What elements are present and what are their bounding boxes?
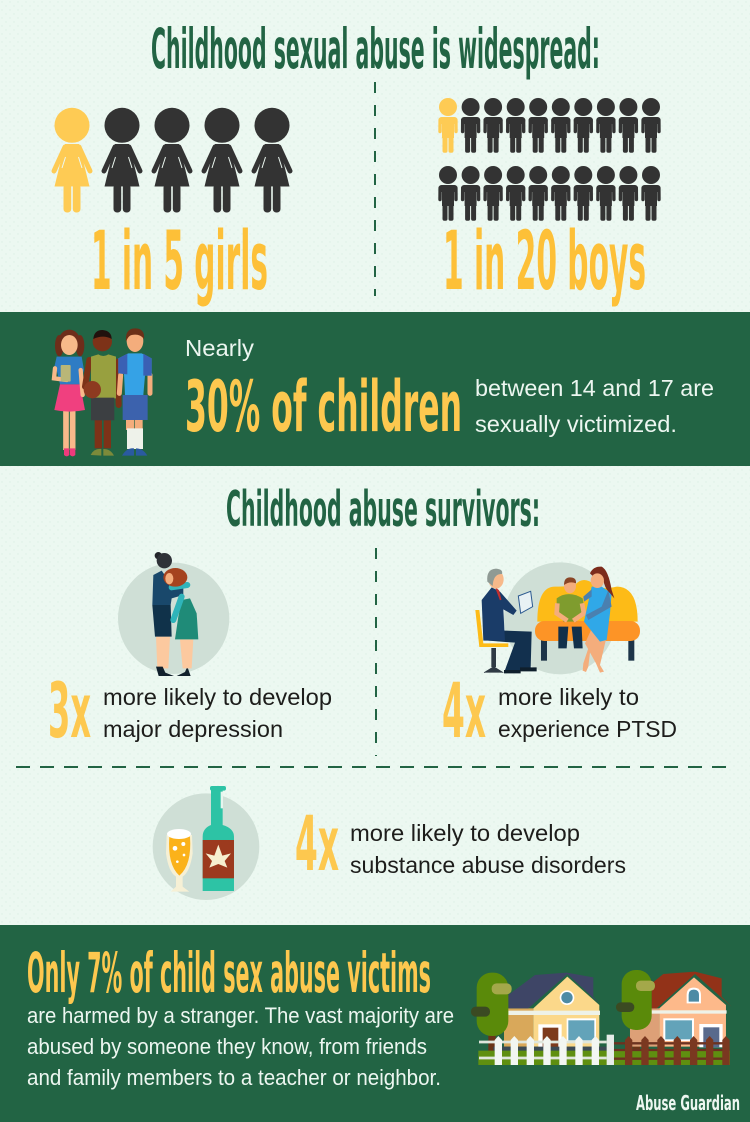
- panel: strangers band: [0, 925, 750, 1122]
- text: substance abuse disorders: more likely to develop: [350, 820, 580, 846]
- text: major depression: [103, 684, 332, 742]
- illustration: women hugging: [118, 552, 229, 676]
- panel: PTSD: [442, 562, 677, 755]
- text: explanation: are harmed by a stranger. The vast majority are: [27, 1003, 454, 1028]
- text: major depression: major depression: [103, 716, 283, 742]
- panel: depression: [48, 552, 332, 755]
- panel: PTSD: 4x: [442, 666, 486, 755]
- illustration: three teenagers: [54, 328, 152, 456]
- illustration: therapist with mother and child: [475, 562, 640, 674]
- text: experience PTSD: more likely to: [498, 684, 639, 710]
- text: 1 in 5 girls: [91, 215, 268, 309]
- icon: five girl figures: [54, 108, 290, 212]
- text: nearly: Nearly: [185, 335, 255, 361]
- panel: 30% of children band: [0, 312, 750, 466]
- text: age range: between 14 and 17 are: [475, 375, 714, 401]
- panel: boys statistic: [438, 98, 660, 309]
- text: experience PTSD: experience PTSD: [498, 716, 677, 742]
- text: explanation: and family members to a teacher or neighbor.: [27, 1065, 441, 1090]
- text: explanation: abused by someone they know, from friends: [27, 1034, 427, 1059]
- illustration: two houses with fences: [471, 970, 732, 1065]
- icon: twenty boy figures: [438, 98, 660, 221]
- illustration: beer glass and bottle: [153, 786, 259, 900]
- text: substance abuse disorders: [350, 820, 626, 878]
- text: age range: sexually victimized.: [475, 411, 677, 437]
- panel: depression: 3x: [48, 666, 91, 755]
- text: age range: [475, 375, 714, 437]
- text: substance abuse disorders: substance abuse disorders: [350, 852, 626, 878]
- panel: girls statistic: [54, 108, 290, 309]
- panel: substance abuse: [153, 786, 626, 900]
- panel: substance abuse: 4x: [295, 799, 339, 888]
- text: major depression: more likely to develop: [103, 684, 332, 710]
- text: experience PTSD: [498, 684, 677, 742]
- text: explanation: [27, 1003, 454, 1090]
